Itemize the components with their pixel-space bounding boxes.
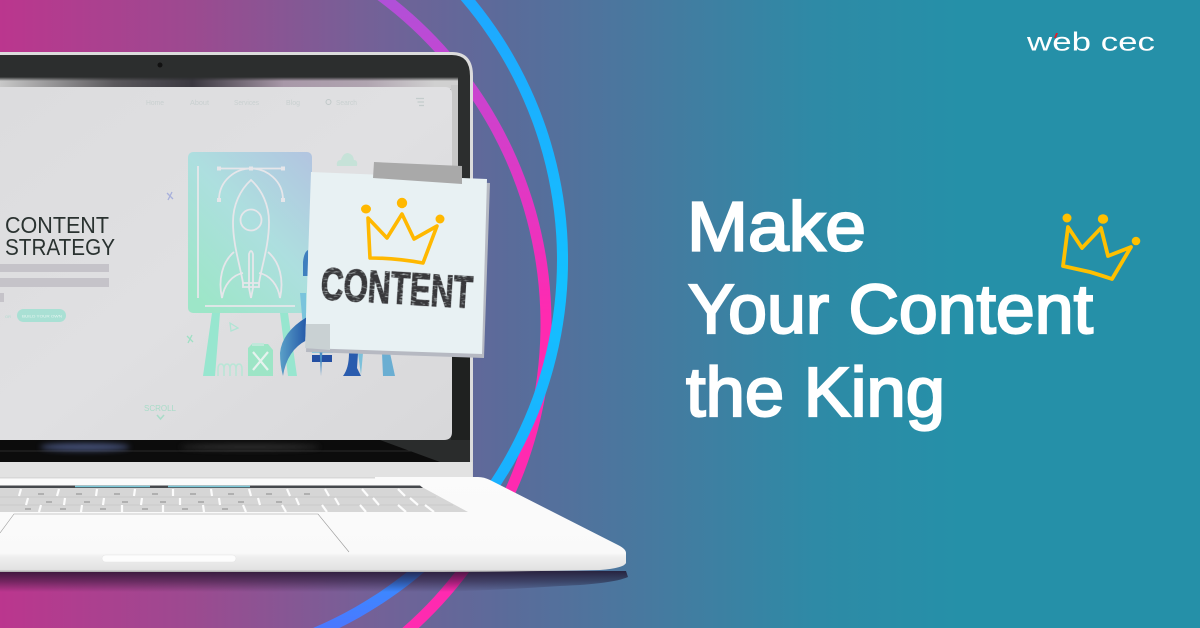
note paper [305, 172, 487, 354]
screen heading: content strategy [5, 212, 115, 260]
rocket board [188, 152, 312, 313]
laptop lid [0, 52, 473, 478]
note shadow [306, 176, 490, 358]
screen button: OR [5, 314, 11, 319]
front thumb notch [102, 555, 236, 562]
spring [218, 364, 242, 376]
screen button [5, 309, 66, 322]
note folded corner [305, 324, 330, 350]
screen heading: content strategy: STRATEGY [5, 234, 115, 260]
pink arc [378, 0, 552, 628]
laptop [0, 52, 628, 592]
blue arc [313, 0, 568, 628]
laptop base [0, 477, 626, 572]
astronaut figure [280, 250, 395, 376]
screen nav menu: About [190, 98, 210, 107]
screen decoration marks [167, 192, 238, 343]
note word: content: CONTENT [319, 258, 474, 318]
laptop shadow [0, 571, 628, 592]
headline: the King [686, 353, 945, 431]
screen heading: content strategy: CONTENT [5, 212, 109, 238]
cloud icon [337, 153, 357, 166]
keyboard [0, 486, 468, 512]
screen button: BUILD YOUR OWN [22, 314, 62, 318]
screen text placeholder bars [0, 264, 109, 302]
screen nav menu: Blog [286, 98, 300, 107]
easel legs [203, 313, 297, 376]
sticky note [305, 162, 490, 358]
headline: Make [687, 188, 866, 266]
headline: Your Content [688, 270, 1093, 348]
screen nav menu: Services [234, 98, 259, 107]
screen nav menu: Search [336, 98, 357, 107]
fuel can [248, 343, 273, 376]
brand logo: web cec [1026, 26, 1155, 56]
scroll indicator: SCROLL [144, 404, 177, 413]
note tape [373, 162, 462, 184]
screen nav menu [146, 98, 424, 107]
scroll indicator [144, 404, 177, 419]
screen nav menu: Home [146, 98, 164, 107]
headline crown icon [1062, 214, 1140, 279]
headline [686, 188, 1093, 431]
note crown icon [361, 198, 444, 263]
trackpad outline [0, 514, 349, 552]
